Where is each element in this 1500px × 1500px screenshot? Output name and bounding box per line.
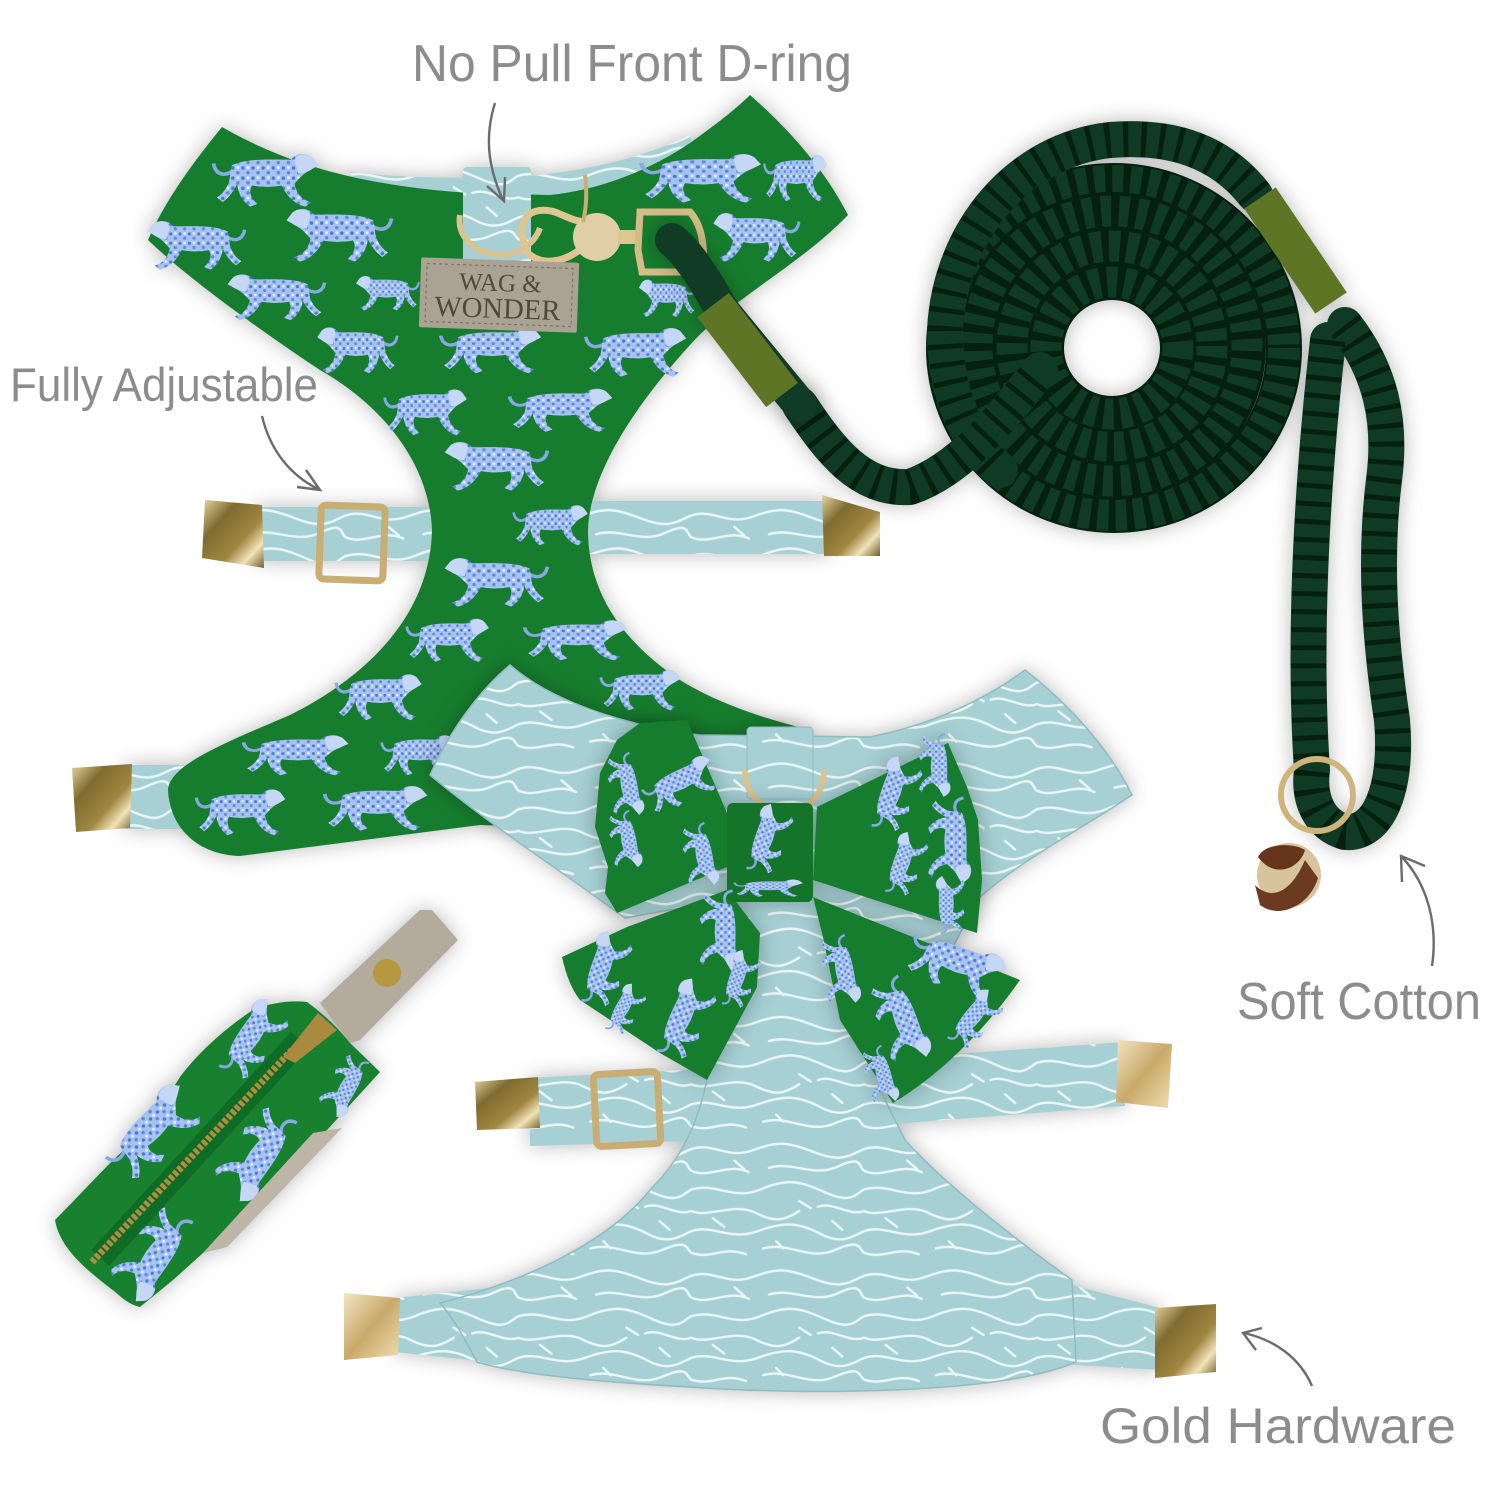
- D-ring: [460, 215, 540, 255]
- pouch leopards: [99, 994, 374, 1307]
- coiled rope rings: [944, 181, 1284, 515]
- label: Fully Adjustable: Fully Adjustable: [10, 358, 318, 411]
- leather tab: [320, 910, 458, 1043]
- neck strap tab: [463, 167, 531, 265]
- zipper teeth: [92, 1050, 292, 1262]
- green pouch: [55, 1001, 380, 1307]
- zipper pull: [283, 1013, 337, 1063]
- incoming strand: [800, 370, 1040, 487]
- swivel square: [638, 212, 704, 272]
- handle loop rope: [1309, 325, 1393, 832]
- gold buckles, mint harness: [344, 1040, 1216, 1378]
- brand label: WONDER: [434, 291, 562, 327]
- side label: [203, 1128, 342, 1253]
- rivet: [373, 959, 401, 987]
- bow loops: [595, 720, 982, 933]
- label: Soft Cotton: Soft Cotton: [1237, 973, 1481, 1031]
- arrow to rope: [1401, 856, 1434, 966]
- thumb lever: [583, 175, 586, 222]
- slider buckle, mint harness: [593, 1071, 661, 1147]
- top strand into sleeve: [945, 139, 1255, 470]
- snap hook body: [573, 213, 621, 261]
- neck tab: [747, 727, 813, 799]
- swivel: [618, 230, 636, 244]
- rope by the snap: [672, 240, 800, 405]
- gold buckles, green harness: [72, 495, 880, 832]
- green harness: [125, 95, 848, 856]
- arrow to buckle: [1243, 1328, 1312, 1386]
- lower strap: [125, 765, 185, 829]
- green body: [148, 95, 848, 856]
- upper strap left: [255, 507, 445, 561]
- olive sleeve: [713, 305, 782, 395]
- left chest strap: [530, 1068, 720, 1146]
- bow leopards: [575, 734, 1010, 1107]
- right chest strap: [870, 1042, 1125, 1125]
- olive sleeve on coil: [1260, 198, 1331, 303]
- rope and sleeve near snap: [672, 240, 800, 405]
- zipper tape: [100, 1040, 300, 1258]
- brand label: [419, 257, 579, 333]
- label: No Pull Front D-ring: No Pull Front D-ring: [412, 35, 852, 93]
- upper strap right: [575, 501, 830, 554]
- snap hook loop: [522, 210, 590, 261]
- front D-ring and snap hook: [460, 175, 704, 272]
- mint lining at neck: [350, 135, 700, 205]
- bow tails: [562, 890, 1020, 1103]
- sailor bow: [562, 720, 1020, 1107]
- bow knot: [727, 803, 813, 902]
- ring: [1281, 759, 1353, 831]
- label: Gold Hardware: Gold Hardware: [1100, 1398, 1456, 1454]
- mint body: [430, 665, 1132, 1391]
- mint harness: [395, 665, 1160, 1391]
- rope leash coil: [800, 139, 1393, 832]
- slider buckle, green harness: [319, 505, 385, 581]
- D-ring: [745, 770, 824, 812]
- arrow to D-ring: [487, 103, 505, 201]
- leopard print: [148, 154, 827, 835]
- arrow to strap: [262, 416, 320, 490]
- charm: [1255, 843, 1321, 911]
- poop bag holder: [55, 910, 458, 1307]
- brand label: WAG &: [459, 269, 542, 298]
- leash ring and charm: [1255, 759, 1353, 911]
- lower straps: [395, 1282, 1160, 1370]
